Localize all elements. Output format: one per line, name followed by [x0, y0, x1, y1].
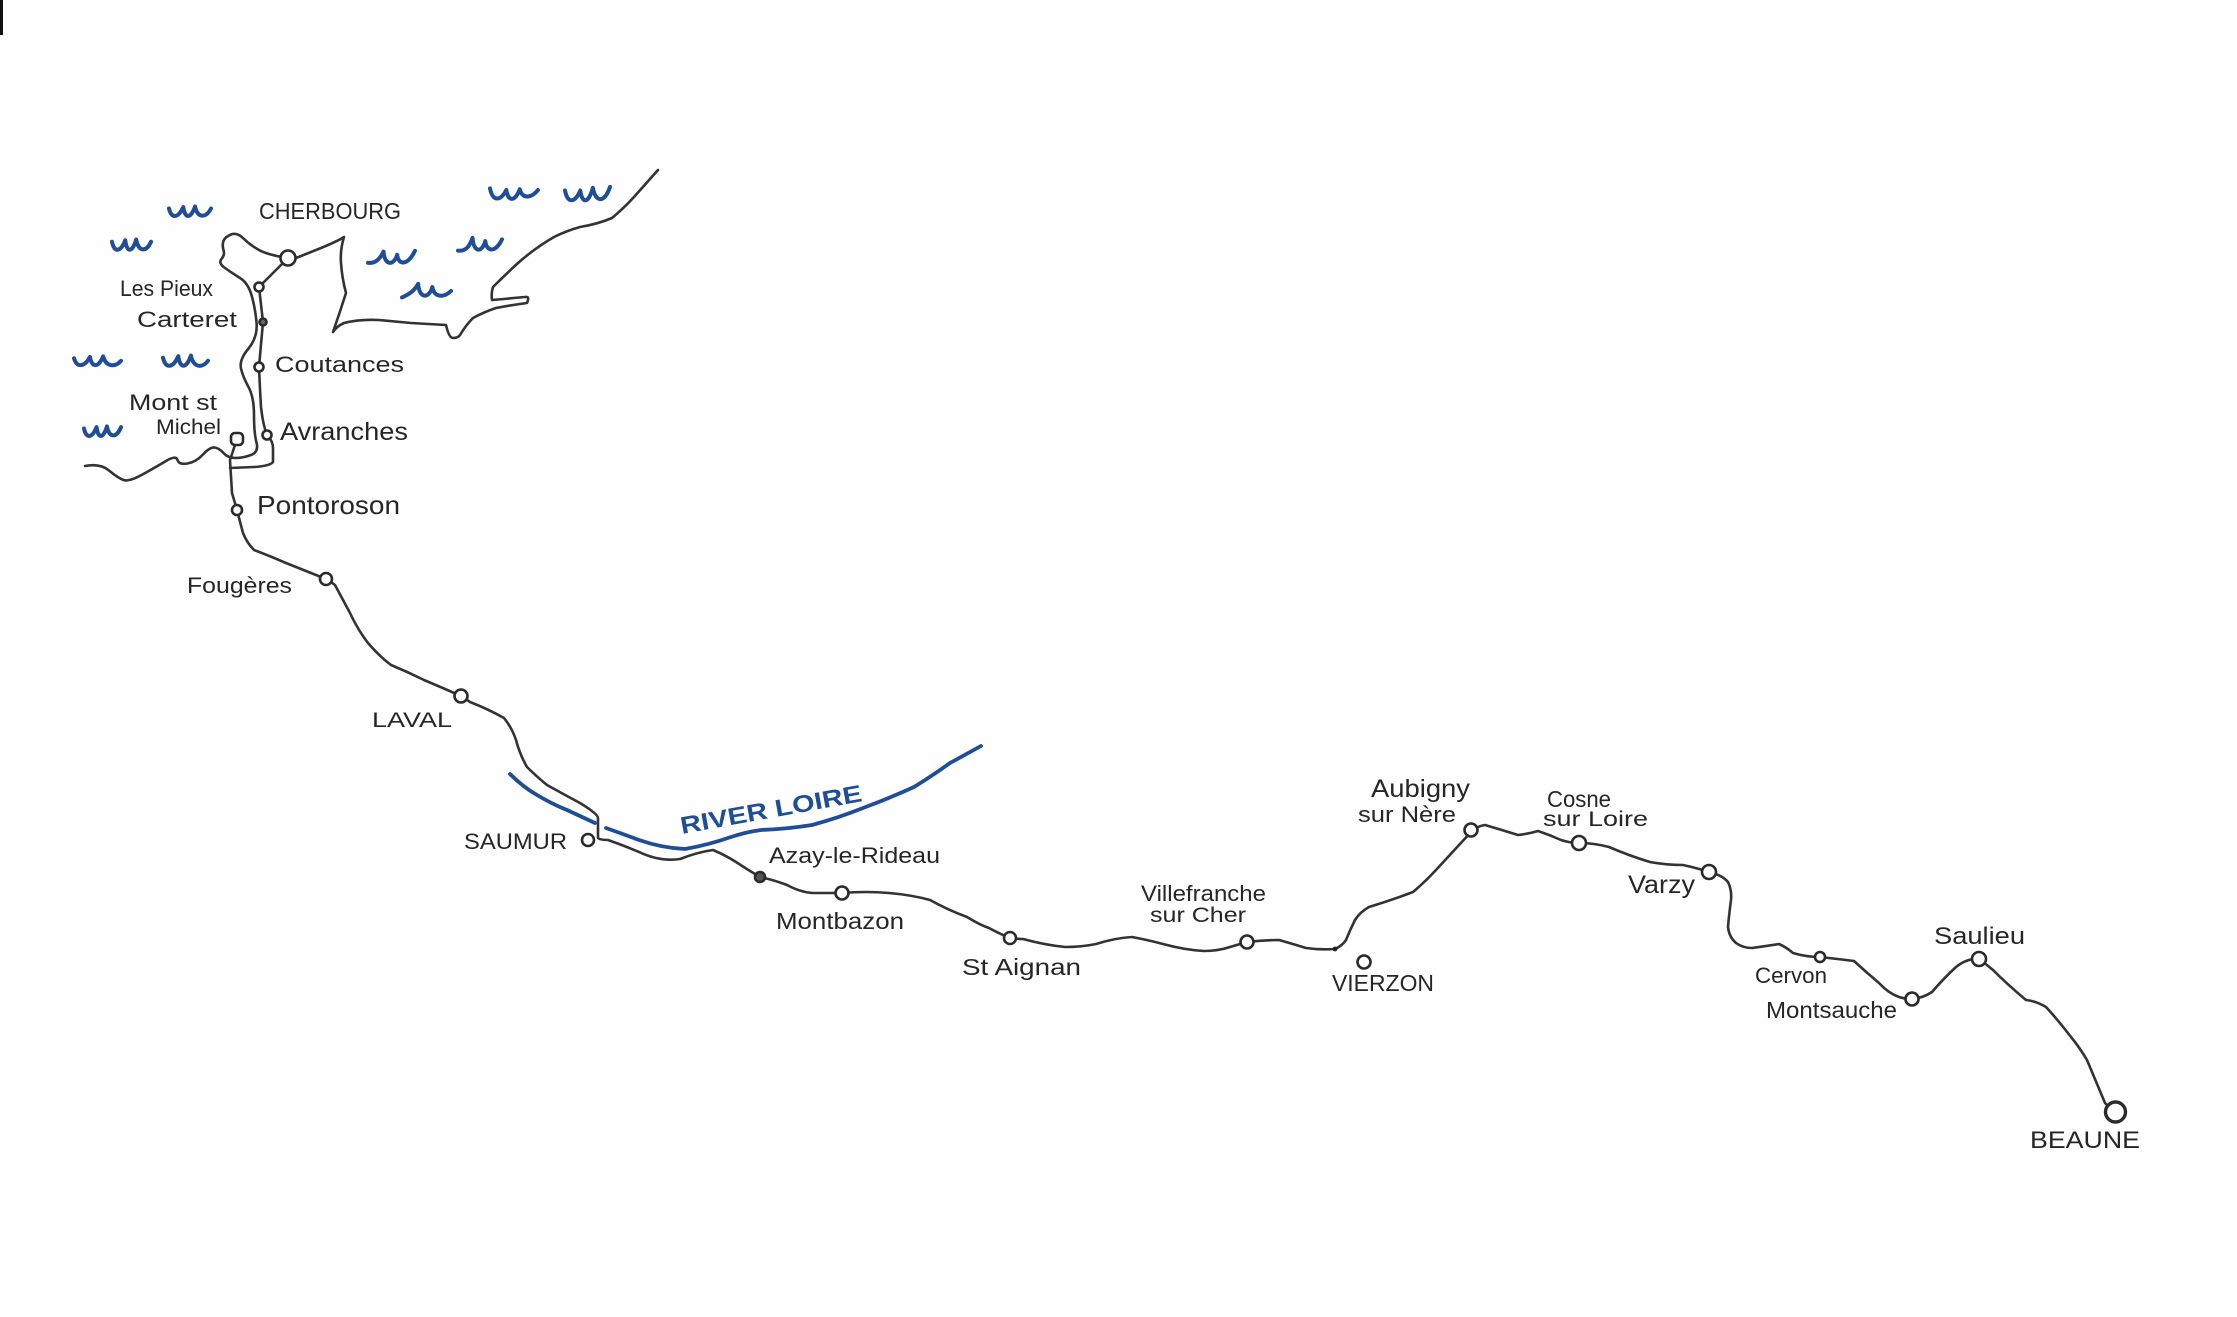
stop: Cervon	[1755, 952, 1827, 988]
stop: Cosne sur Loire: sur Loire	[1543, 808, 1648, 831]
junction dot	[1333, 947, 1337, 951]
stop: St Aignan: St Aignan	[962, 954, 1081, 980]
stop: Beaune: BEAUNE	[2030, 1127, 2140, 1154]
stop: Mont St Michel: Mont st	[129, 390, 217, 415]
coastline: east Cotentin and Normandy	[296, 170, 658, 338]
stop: Carteret	[137, 307, 266, 332]
stop: Saumur: SAUMUR	[464, 829, 567, 854]
stop: Les Pieux	[120, 276, 264, 301]
stop: Cherbourg: CHERBOURG	[259, 198, 401, 224]
stop: Cosne sur Loire: Cosne	[1547, 786, 1611, 812]
stop: Mont St Michel: Michel	[156, 416, 221, 439]
stop: Villefranche sur Cher	[1141, 881, 1266, 948]
stop: Avranches: Avranches	[280, 418, 408, 446]
stop: Laval	[372, 690, 468, 732]
stop: Les Pieux: Les Pieux	[120, 276, 213, 301]
stop: Fougères: Fougères	[187, 573, 292, 598]
stop: Villefranche sur Cher: Villefranche	[1141, 881, 1266, 906]
stop: Beaune	[2030, 1102, 2140, 1154]
stop: Cervon: Cervon	[1755, 963, 1827, 988]
stop: Carteret: Carteret	[137, 307, 237, 332]
coastline: west Cotentin and Brittany	[85, 234, 288, 480]
route: Cherbourg to Cotentin loop	[230, 258, 288, 468]
stop: Vierzon: VIERZON	[1332, 970, 1434, 996]
stop: Montsauche: Montsauche	[1766, 997, 1897, 1023]
stop: Varzy: Varzy	[1628, 871, 1696, 899]
stop: Pontorson: Pontoroson	[257, 490, 400, 520]
stop: Mont St Michel	[129, 390, 243, 445]
sea waves	[74, 187, 610, 436]
river Loire	[510, 746, 981, 849]
stop: Aubigny sur Nère	[1358, 775, 1478, 836]
stop: Aubigny sur Nère: Aubigny	[1371, 775, 1471, 803]
stop: Azay-le-Rideau: Azay-le-Rideau	[769, 843, 940, 868]
stop: Montbazon	[776, 886, 904, 934]
stop: St Aignan	[962, 932, 1081, 980]
stop: Cosne sur Loire	[1543, 786, 1648, 850]
stop: Laval: LAVAL	[372, 709, 452, 732]
stop: Fougères	[187, 573, 332, 598]
river Loire: RIVER LOIRE	[678, 780, 864, 840]
stop: Montbazon: Montbazon	[776, 908, 904, 934]
stop: Azay-le-Rideau	[755, 843, 940, 882]
stop: Aubigny sur Nère: sur Nère	[1358, 802, 1456, 827]
stop: Vierzon	[1332, 956, 1434, 996]
stop: Coutances: Coutances	[275, 352, 404, 377]
route: Mont St Michel to Beaune	[230, 439, 2115, 1113]
stop: Cherbourg	[259, 198, 401, 266]
stop: Saulieu: Saulieu	[1934, 923, 2025, 950]
stop: Varzy	[1628, 865, 1716, 899]
stop: Villefranche sur Cher: sur Cher	[1150, 904, 1246, 927]
stop: Saulieu	[1934, 923, 2025, 966]
